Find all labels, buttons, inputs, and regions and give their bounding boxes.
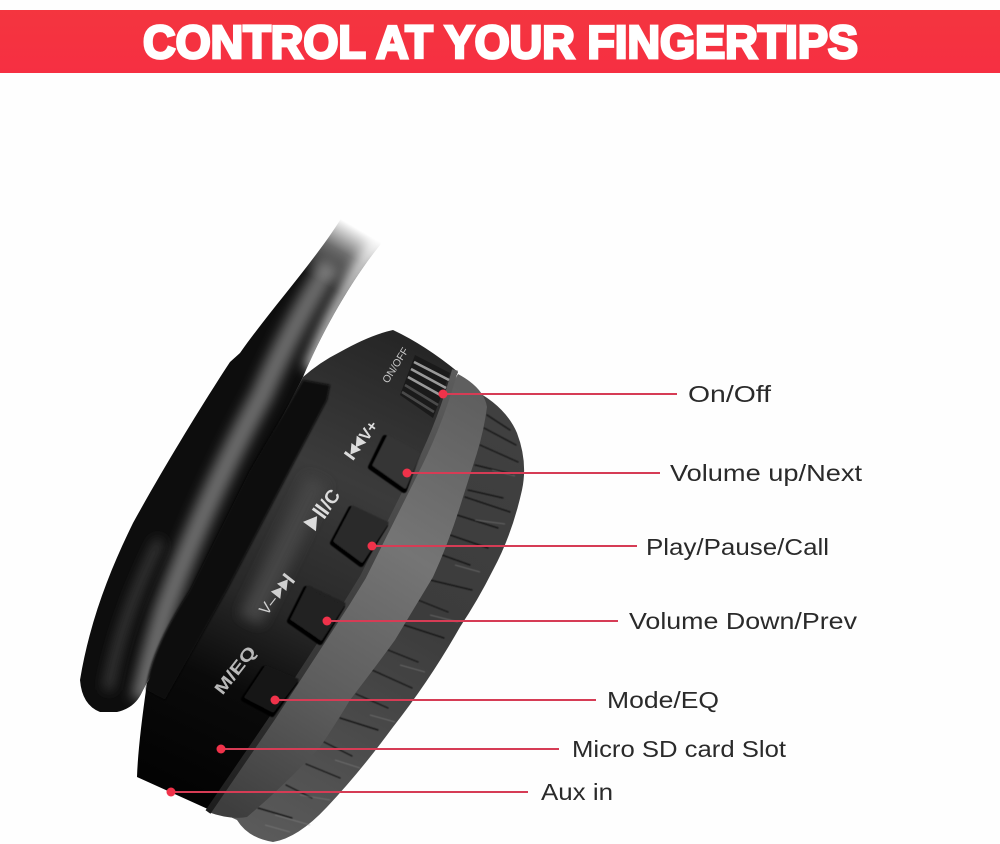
ear pad outer wrinkled leather bbox=[215, 388, 524, 842]
callout: Mode/EQ bbox=[270, 687, 719, 713]
headband bbox=[80, 220, 380, 712]
callout: Mode/EQ: Mode/EQ bbox=[607, 687, 719, 713]
callout: Volume Down/Prev bbox=[322, 608, 858, 634]
callout: Play/Pause/Call bbox=[368, 534, 829, 560]
printed label V-: V– bbox=[256, 593, 282, 619]
callout: Play/Pause/Call: Play/Pause/Call bbox=[646, 534, 829, 560]
callout: Volume up/Next bbox=[402, 460, 863, 486]
printed label ON/OFF: ON/OFF bbox=[380, 346, 411, 386]
button: volume up next bbox=[371, 437, 419, 490]
headphone illustration bbox=[60, 190, 524, 842]
printed label play pause call: /C bbox=[317, 485, 345, 513]
header banner bbox=[0, 10, 1000, 73]
button: mode eq bbox=[244, 667, 297, 714]
button: play pause call bbox=[333, 507, 387, 564]
callout: Volume up/Next: Volume up/Next bbox=[670, 460, 863, 486]
callout: Micro SD card Slot: Micro SD card Slot bbox=[572, 736, 787, 762]
ear pad inner smooth ring bbox=[208, 374, 487, 818]
callout: On/Off bbox=[438, 381, 772, 407]
printed label V+ bbox=[343, 418, 382, 463]
callout: Volume Down/Prev: Volume Down/Prev bbox=[629, 608, 858, 634]
hinge and ear cup body bbox=[137, 330, 458, 810]
printed label V+: V+ bbox=[357, 418, 382, 444]
printed label V- bbox=[256, 573, 298, 619]
callout: Aux in: Aux in bbox=[541, 779, 613, 805]
printed label M/EQ: M/EQ bbox=[211, 642, 260, 698]
callout: Micro SD card Slot bbox=[216, 736, 787, 762]
printed label play pause call bbox=[302, 485, 345, 534]
title: CONTROL AT YOUR FINGERTIPS bbox=[143, 16, 858, 68]
leather wrinkles bbox=[258, 415, 518, 818]
button: volume down prev bbox=[290, 587, 344, 642]
ON/OFF switch wheel bbox=[400, 355, 450, 418]
callout: Aux in bbox=[166, 779, 613, 805]
cup rim strip bbox=[208, 370, 455, 812]
callout: On/Off: On/Off bbox=[688, 381, 772, 407]
